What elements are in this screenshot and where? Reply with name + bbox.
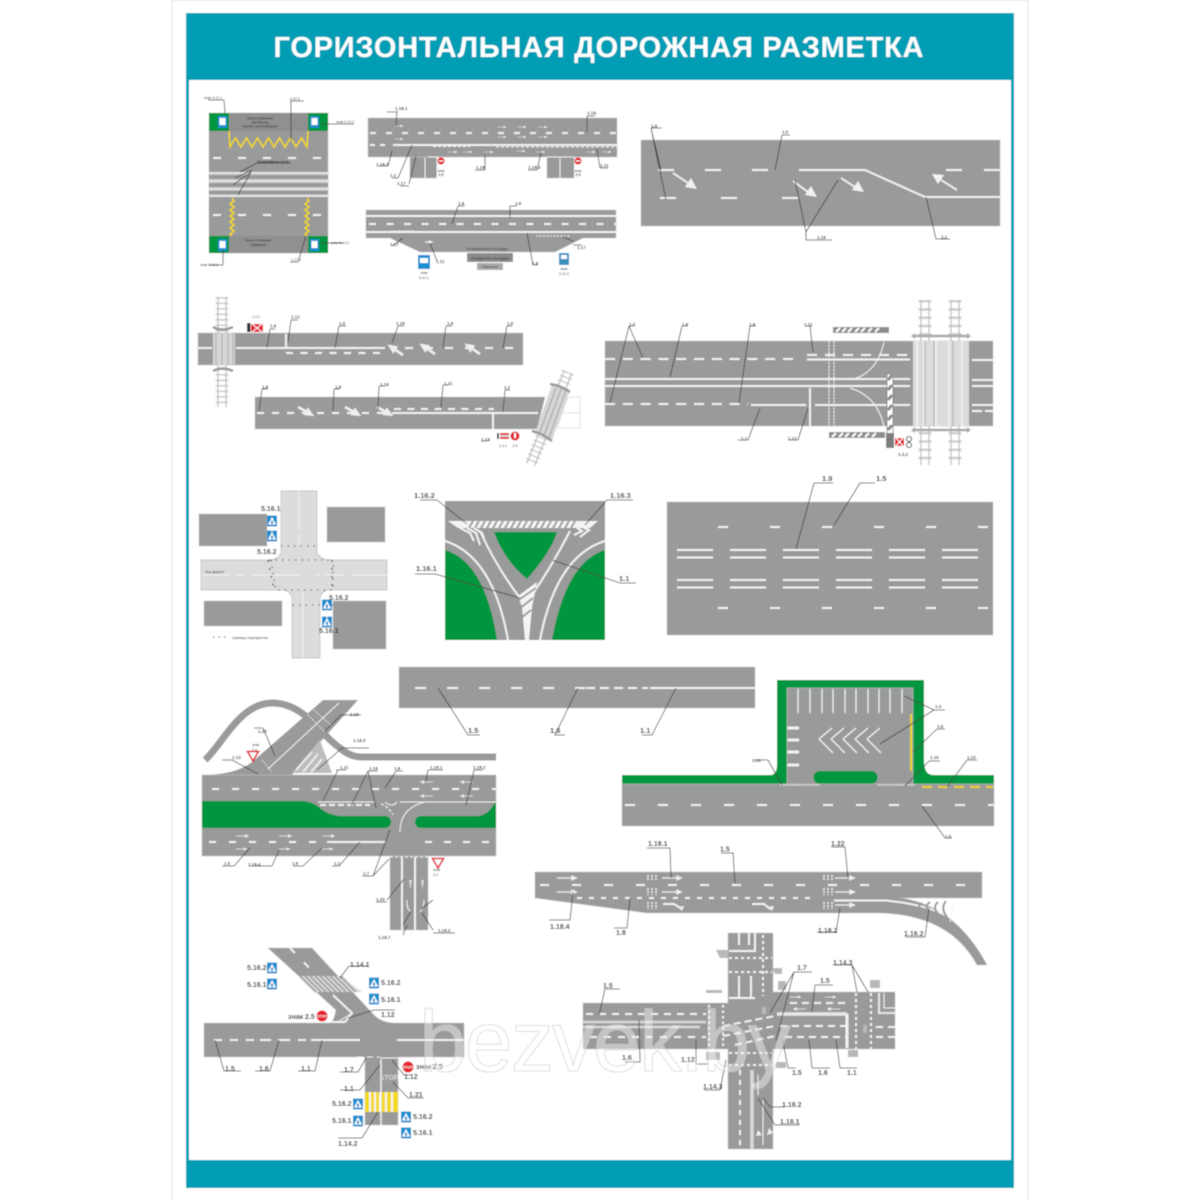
panel: bus and tram stop: и(или) троллейбусов <box>243 124 277 128</box>
panel: T-junction with crossings: 5.16.2 <box>413 1114 433 1121</box>
panel: junction with median: 1.5 <box>224 861 231 866</box>
panel: road with arrows: 1.22 <box>831 841 845 848</box>
panel: road with arrows: 1.16.2 <box>904 931 924 938</box>
panel: railway crossing wide road: 1.12 <box>788 436 797 441</box>
panel: turning lane road: 1.19 <box>817 235 826 240</box>
panel: turning lane road: 1.5 <box>651 124 658 128</box>
panel: bus and tram stop: Зона остановки <box>245 238 271 242</box>
panel: parking area <box>622 680 994 839</box>
panel: parking area: 1.6 <box>937 724 944 729</box>
panel: T-junction with crossings: STOP <box>380 1075 399 1082</box>
panel: turning lane road: 1.1 <box>941 234 948 240</box>
panel: road with bus bays: знак <box>574 169 582 173</box>
panel: junction with median: 1.18.7 <box>378 935 391 940</box>
panel: road with arrows: 1.8 <box>616 930 626 937</box>
panel: parking area: 1.10 <box>752 758 761 763</box>
panel: T-junction with crossings: 5.16.2 <box>247 965 267 972</box>
panel: road with bus bays: 1.18.1 <box>395 106 408 111</box>
panel: railway crossing road, upper: 1.6 <box>507 321 514 326</box>
panel: T-junction with crossings: 5.16.2 <box>332 1101 352 1108</box>
panel: T-junction with crossings: 1.7 <box>344 1067 354 1074</box>
panel: railway crossing wide road: 1.6 <box>682 322 689 327</box>
panel: T-junction with crossings: 1.12 <box>381 1012 395 1019</box>
panel: parking area: 1.10 <box>930 755 939 760</box>
panel: railway crossing wide road: 1.3.2 <box>898 452 909 457</box>
panel: bus and tram stop: Зона остановки <box>247 116 273 120</box>
poster frame <box>172 0 1028 1200</box>
panel: road with stopping area: 1.11 <box>436 259 445 264</box>
watermark: bezvek.by <box>419 994 791 1090</box>
panel: junction with median: 1.20 <box>258 729 267 734</box>
panel: T-junction with crossings: 5.16.2 <box>381 980 401 987</box>
panel: complex intersection: 1.6 <box>818 1070 828 1077</box>
panel: complex intersection: 1.1 <box>847 1070 857 1077</box>
panel: road with stopping area: 5.12.2 <box>559 272 569 276</box>
panel: road with stopping area: знак <box>560 267 568 271</box>
panel: road with bus bays: 1.18. <box>587 110 597 116</box>
panel: road with stopping area: 1.6 <box>458 201 465 206</box>
panel: junction with median: 1.18.4 <box>248 862 261 867</box>
panel: railway crossing road, upper <box>198 297 523 407</box>
panel: junction with median: 1.11 <box>340 765 349 770</box>
panel: road with bus bays: 1.18.3 <box>528 165 541 170</box>
panel: road with bus bays: 1.18.3 <box>376 162 389 167</box>
panel: T-junction with crossings: STOP <box>403 1066 413 1070</box>
panel: road with bus bays: 2.5 <box>438 173 444 177</box>
panel: railway crossing road, upper: 1.3.1 <box>252 315 260 319</box>
panel: double lines road: 1.5 <box>876 474 886 483</box>
panel: road with stopping area: 1.17 <box>577 245 586 250</box>
panel: junction with median: 2.4 <box>433 873 438 877</box>
panel: road with stopping area: Павильон <box>482 265 498 269</box>
panel: road with stopping area: 5.12.1 <box>419 276 429 280</box>
panel: T-junction with crossings: 5.16.1 <box>381 997 401 1004</box>
panel: junction with median: 1.6 <box>292 861 299 866</box>
panel: bus and tram stop: знак 5.13.2 <box>200 263 218 267</box>
panel: T-junction with crossings: 1.1 <box>344 1086 354 1093</box>
panel: railway crossing road, lower: 1.19 <box>380 382 389 387</box>
panel: complex intersection: 1.6 <box>622 1055 632 1062</box>
panel: complex intersection: 1.14.3 <box>833 960 853 967</box>
panel: T-junction with crossings: 1.14.1 <box>350 962 370 969</box>
panel: complex intersection: 1.5 <box>792 1070 802 1077</box>
panel: railway crossing wide road: 1.5 <box>629 322 636 327</box>
panel: complex intersection: 1.5 <box>820 978 830 985</box>
panel: road with arrows: 1.18.4 <box>550 924 570 931</box>
panel: railway crossing wide road: 1.11 <box>804 322 813 327</box>
panel: complex intersection: 1.18.2 <box>782 1102 802 1109</box>
panel: railway crossing road, lower: 1.12 <box>481 437 490 442</box>
panel: double lines road <box>667 474 993 635</box>
panel: railway crossing road, lower <box>255 371 580 466</box>
panel: railway crossing road, lower: 1.3.1 <box>499 444 507 448</box>
panel: pedestrian intersection: 5.16.2 <box>329 595 349 602</box>
panel: bus and tram stop: 1.17.1 <box>290 97 300 101</box>
panel: complex intersection <box>583 933 895 1149</box>
panel: complex intersection: 1.14.3 <box>703 1084 723 1091</box>
panel: T-junction with crossings: 1.1 <box>301 1066 311 1073</box>
panel: parking area: 1.3 <box>935 704 942 709</box>
panel: T-junction with crossings: 1.5 <box>225 1066 235 1073</box>
panel: junction with median: 1.7 <box>363 871 370 876</box>
panel: junction with median: знак <box>433 868 441 872</box>
panel: pedestrian intersection: 5.16.1 <box>319 628 339 635</box>
panel: road with bus bays: 1.11 <box>600 163 609 168</box>
panel: turning lane road <box>641 124 1000 240</box>
panel: T-junction with crossings: 1.14.2 <box>338 1141 358 1148</box>
panel: road with stopping area: Посадочная площадка <box>471 256 509 260</box>
panel: T-junction with crossings: 5.16.1 <box>332 1118 352 1125</box>
panel: island chevrons junction <box>414 491 636 640</box>
panel: complex intersection: 1.12 <box>681 1057 695 1064</box>
panel: railway crossing road, lower: 1.6 <box>262 384 269 390</box>
panel: pedestrian intersection: 5.16.1 <box>261 506 281 513</box>
panel: road with arrows: 1.18.2 <box>818 928 838 935</box>
panel: turning lane road: 1.5 <box>782 130 789 134</box>
panel: bus and tram stop: трамваев <box>250 243 266 247</box>
panel: junction with median: 1.18.3 <box>353 738 366 743</box>
panel: bus and tram stop: знак 5.13.2 <box>331 241 349 245</box>
panel: railway crossing road, upper: 1.6 <box>447 321 454 326</box>
panel: pedestrian intersection: - границы перекрестка <box>230 636 268 640</box>
panel: junction with median: 1.1 <box>334 861 341 866</box>
panel: complex intersection: 1.5 <box>603 983 613 990</box>
panel: road with stopping area: 1.8 <box>532 261 539 266</box>
panel: T-junction with crossings: 1.12 <box>404 1074 418 1081</box>
panel: bus and tram stop: автобусов <box>252 120 269 124</box>
panel: road with bus bays: 1.1 <box>390 173 397 178</box>
panel: junction with median <box>202 700 496 940</box>
panel: junction with median: 2.4 <box>252 748 257 752</box>
panel: island chevrons junction: 1.16.3 <box>610 491 631 500</box>
panel: pedestrian intersection <box>199 491 387 658</box>
panel: road with stopping area: знак <box>420 271 428 275</box>
panel: road with stopping area <box>366 201 616 280</box>
panel: T-junction with crossings <box>204 948 464 1148</box>
panel: railway crossing road, lower: 1.6 <box>335 384 342 390</box>
panel: T-junction with crossings: знак 2.5 <box>416 1064 443 1071</box>
panel: railway crossing road, lower: 1.11 <box>444 381 453 386</box>
panel: railway crossing road, upper: 1.12 <box>291 314 300 320</box>
panel: junction with median: 1.18.1 <box>430 765 443 770</box>
panel: straight road dash and solid <box>399 667 755 735</box>
panel: complex intersection: 1.7 <box>797 965 807 972</box>
panel: railway crossing road, upper: 1.19 <box>396 321 405 326</box>
panel: junction with median: 1.19 <box>369 766 378 771</box>
panel: double lines road: 1.9 <box>822 474 832 483</box>
panel: railway crossing wide road: 1.1 <box>741 436 748 441</box>
panel: road with stopping area: 1.6 <box>515 201 522 206</box>
panel: junction with median: 1.6 <box>394 766 401 771</box>
panel: T-junction with crossings: 5.16.1 <box>247 982 267 989</box>
panel: T-junction with crossings: 1.21 <box>409 1092 423 1099</box>
panel: junction with median: 1.18.2 <box>473 765 486 770</box>
panel: T-junction with crossings: знак 2.5 <box>288 1014 315 1021</box>
panel: parking area: 1.5 <box>945 834 952 839</box>
panel: T-junction with crossings: 5.16.1 <box>413 1130 433 1137</box>
panel: bus and tram stop: знак 5.12.1 <box>204 96 222 100</box>
panel: railway crossing road, upper: 1.6 <box>270 324 277 328</box>
panel: island chevrons junction: 1.1 <box>619 574 629 583</box>
panel: road with bus bays: 1.17 <box>397 181 406 186</box>
panel: junction with median: 1.10 <box>350 712 359 717</box>
panel: pedestrian intersection: 5.16.2 <box>257 549 277 556</box>
panel: pedestrian intersection: Ось дороги <box>205 570 224 574</box>
panel: railway crossing road, lower: 2.5 <box>512 444 518 448</box>
panel: junction with median: 1.20 <box>376 897 385 902</box>
panel: T-junction with crossings: STOP <box>317 1014 327 1018</box>
panel: straight road dash and solid: 1.6 <box>550 726 560 735</box>
panel: railway crossing road, upper: 1.6 <box>339 321 346 326</box>
panel: road with arrows: 1.18.1 <box>648 841 668 848</box>
panel: road with stopping area: Остановочная площадка <box>466 247 508 251</box>
panel: bus and tram stop: 1.17.2 <box>291 258 301 262</box>
panel: bus and tram stop: знак 5.12.2 <box>336 120 354 124</box>
panel: road with arrows <box>535 841 987 965</box>
panel: junction with median: 1.13 <box>232 755 241 760</box>
panel: road with bus bays <box>368 106 620 186</box>
panel: T-junction with crossings: 1.6 <box>259 1066 269 1073</box>
panel: road with arrows: 1.5 <box>720 846 730 854</box>
panel: bus and tram stop <box>200 96 354 267</box>
panel: island chevrons junction: 1.16.2 <box>414 491 435 500</box>
panel: straight road dash and solid: 1.5 <box>468 726 478 735</box>
panel: railway crossing wide road <box>605 300 993 465</box>
panel: railway crossing road, lower: 1.1 <box>504 385 511 390</box>
panel: straight road dash and solid: 1.1 <box>640 726 650 735</box>
panel: railway crossing wide road: 1.6 <box>749 322 756 327</box>
title: ГОРИЗОНТАЛЬНАЯ ДОРОЖНАЯ РАЗМЕТКА <box>274 32 924 64</box>
panel: island chevrons junction: 1.16.1 <box>416 564 437 573</box>
panel: junction with median: знак <box>252 743 260 747</box>
panel: road with bus bays: 1.18 <box>476 165 485 170</box>
panel: parking area: 1.10 <box>967 755 976 760</box>
panel: bus and tram stop: Трамвайные пути <box>257 160 289 164</box>
panel: road with stopping area: 1.17 <box>390 242 399 247</box>
panel: junction with median: 1.18.2 <box>438 928 451 933</box>
panel: complex intersection: 1.18.1 <box>780 1119 800 1126</box>
panel: road with bus bays: знак <box>437 169 445 173</box>
panel: road with bus bays: 2.5 <box>576 173 580 177</box>
